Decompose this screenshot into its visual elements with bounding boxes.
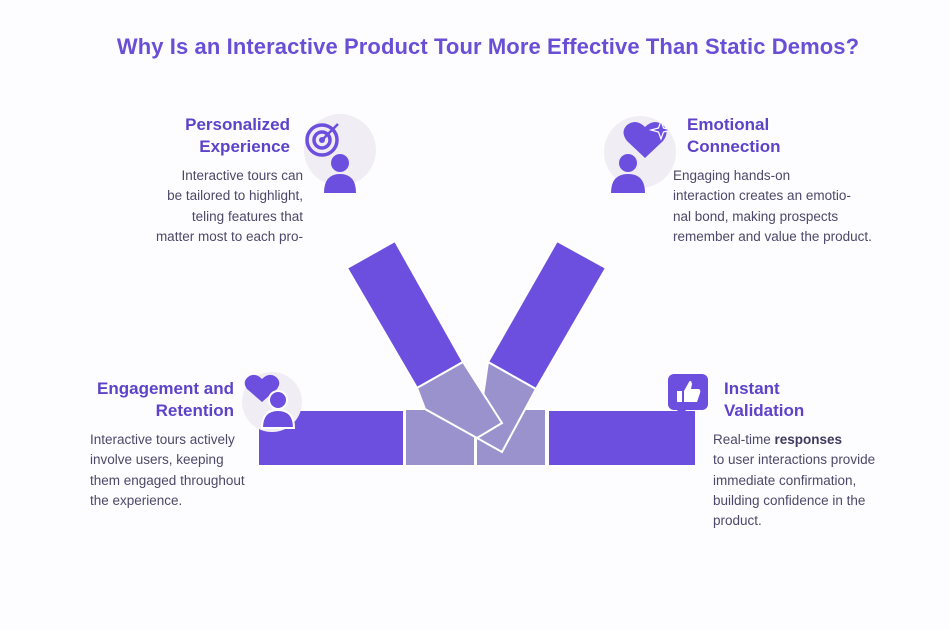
text: emotional: interaction creates an emotio- <box>673 188 851 203</box>
text: emotional <box>673 168 872 244</box>
icon: heart person <box>242 372 302 432</box>
text: engagement: the experience. <box>90 493 182 508</box>
heading: engagement <box>97 379 234 420</box>
text: instant validation: Real-time responses <box>713 432 842 447</box>
diagonal: left arm <box>347 241 502 438</box>
heading: emotional: Connection <box>687 137 780 156</box>
bar: center light right <box>476 409 546 466</box>
heading: instant validation <box>724 379 804 420</box>
bar: validation right <box>548 410 696 466</box>
text: personalized <box>156 168 303 244</box>
text: instant validation: immediate confirmation, <box>713 473 856 488</box>
bar: center light left <box>405 409 475 466</box>
text: engagement <box>90 432 245 508</box>
text: personalized: Interactive tours can <box>181 168 303 183</box>
text: instant validation: building confidence in the <box>713 493 865 508</box>
text: instant validation: to user interactions provide <box>713 452 875 467</box>
text: personalized: matter most to each pro- <box>156 229 303 244</box>
heading: engagement: Retention <box>156 401 234 420</box>
icon: thumbs up bubble <box>668 374 708 411</box>
heading: personalized: Experience <box>199 137 290 156</box>
text: instant validation: product. <box>713 513 762 528</box>
text: engagement: them engaged throughout <box>90 473 245 488</box>
heading: emotional <box>687 115 780 156</box>
heading: instant validation: Instant <box>724 379 780 398</box>
text: engagement: Interactive tours actively <box>90 432 235 447</box>
diagonal: right arm <box>477 241 606 452</box>
text: emotional: Engaging hands-on <box>673 168 790 183</box>
text: personalized: be tailored to highlight, <box>167 188 303 203</box>
text: instant validation <box>713 432 875 528</box>
icon: heart with person <box>604 116 676 193</box>
heading: instant validation: Validation <box>724 401 804 420</box>
title: Why Is an Interactive Product Tour More Effective Than Static Demos? <box>117 34 859 59</box>
text: emotional: nal bond, making prospects <box>673 209 838 224</box>
icon: target with person <box>304 114 376 193</box>
bar: engagement left <box>258 410 404 466</box>
heading: emotional: Emotional <box>687 115 769 134</box>
heading: engagement: Engagement and <box>97 379 234 398</box>
text: personalized: teling features that <box>192 209 303 224</box>
heading: personalized <box>185 115 290 156</box>
text: engagement: involve users, keeping <box>90 452 224 467</box>
text: emotional: remember and value the product. <box>673 229 872 244</box>
heading: personalized: Personalized <box>185 115 290 134</box>
